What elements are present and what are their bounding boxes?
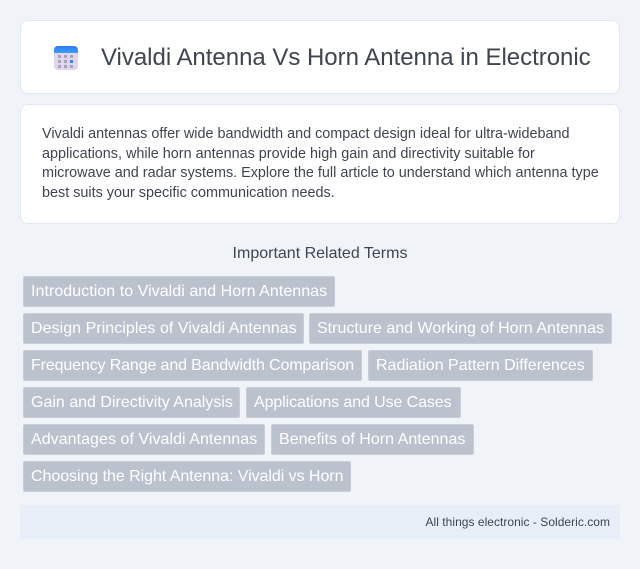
- tag: [23, 350, 362, 381]
- tag: [368, 350, 593, 381]
- tag: Applications and Use Cases: [254, 394, 452, 411]
- tag: [309, 313, 612, 344]
- tag: Radiation Pattern Differences: [376, 357, 585, 374]
- footer text: All things electronic - Solderic.com: [426, 515, 610, 529]
- title: Vivaldi Antenna Vs Horn Antenna in Electronic: [101, 44, 591, 71]
- tag: [23, 461, 351, 492]
- tag: Structure and Working of Horn Antennas: [317, 320, 604, 337]
- tag: Introduction to Vivaldi and Horn Antennas: [31, 283, 327, 300]
- tag: Frequency Range and Bandwidth Comparison: [31, 357, 354, 374]
- heading: related terms: Important Related Terms: [233, 245, 407, 262]
- text block: summary: best suits your specific communication needs.: [42, 184, 335, 200]
- tag: Choosing the Right Antenna: Vivaldi vs Horn: [31, 468, 343, 485]
- tag: [271, 424, 474, 455]
- icon: calendar: [54, 46, 78, 70]
- tag: [23, 313, 304, 344]
- panel: summary card: [20, 104, 620, 224]
- tag: [23, 424, 265, 455]
- tag: Gain and Directivity Analysis: [31, 394, 233, 411]
- text block: summary: applications, while horn antennas provide high gain and directivity suitable for: [42, 146, 535, 162]
- panel: related term tags: [23, 276, 612, 492]
- tag: [246, 387, 461, 418]
- panel: header card: [20, 20, 620, 94]
- tag: Advantages of Vivaldi Antennas: [31, 431, 257, 448]
- tag: Design Principles of Vivaldi Antennas: [31, 320, 297, 337]
- text block: summary: Vivaldi antennas offer wide bandwidth and compact design ideal for ultra-wideband: [42, 126, 569, 142]
- tag: [23, 276, 335, 307]
- footer bar: [20, 505, 620, 539]
- text block: summary: [42, 126, 599, 200]
- tag: Benefits of Horn Antennas: [279, 431, 465, 448]
- text block: summary: microwave and radar systems. Explore the full article to understand which antenna type: [42, 165, 599, 181]
- tag: [23, 387, 240, 418]
